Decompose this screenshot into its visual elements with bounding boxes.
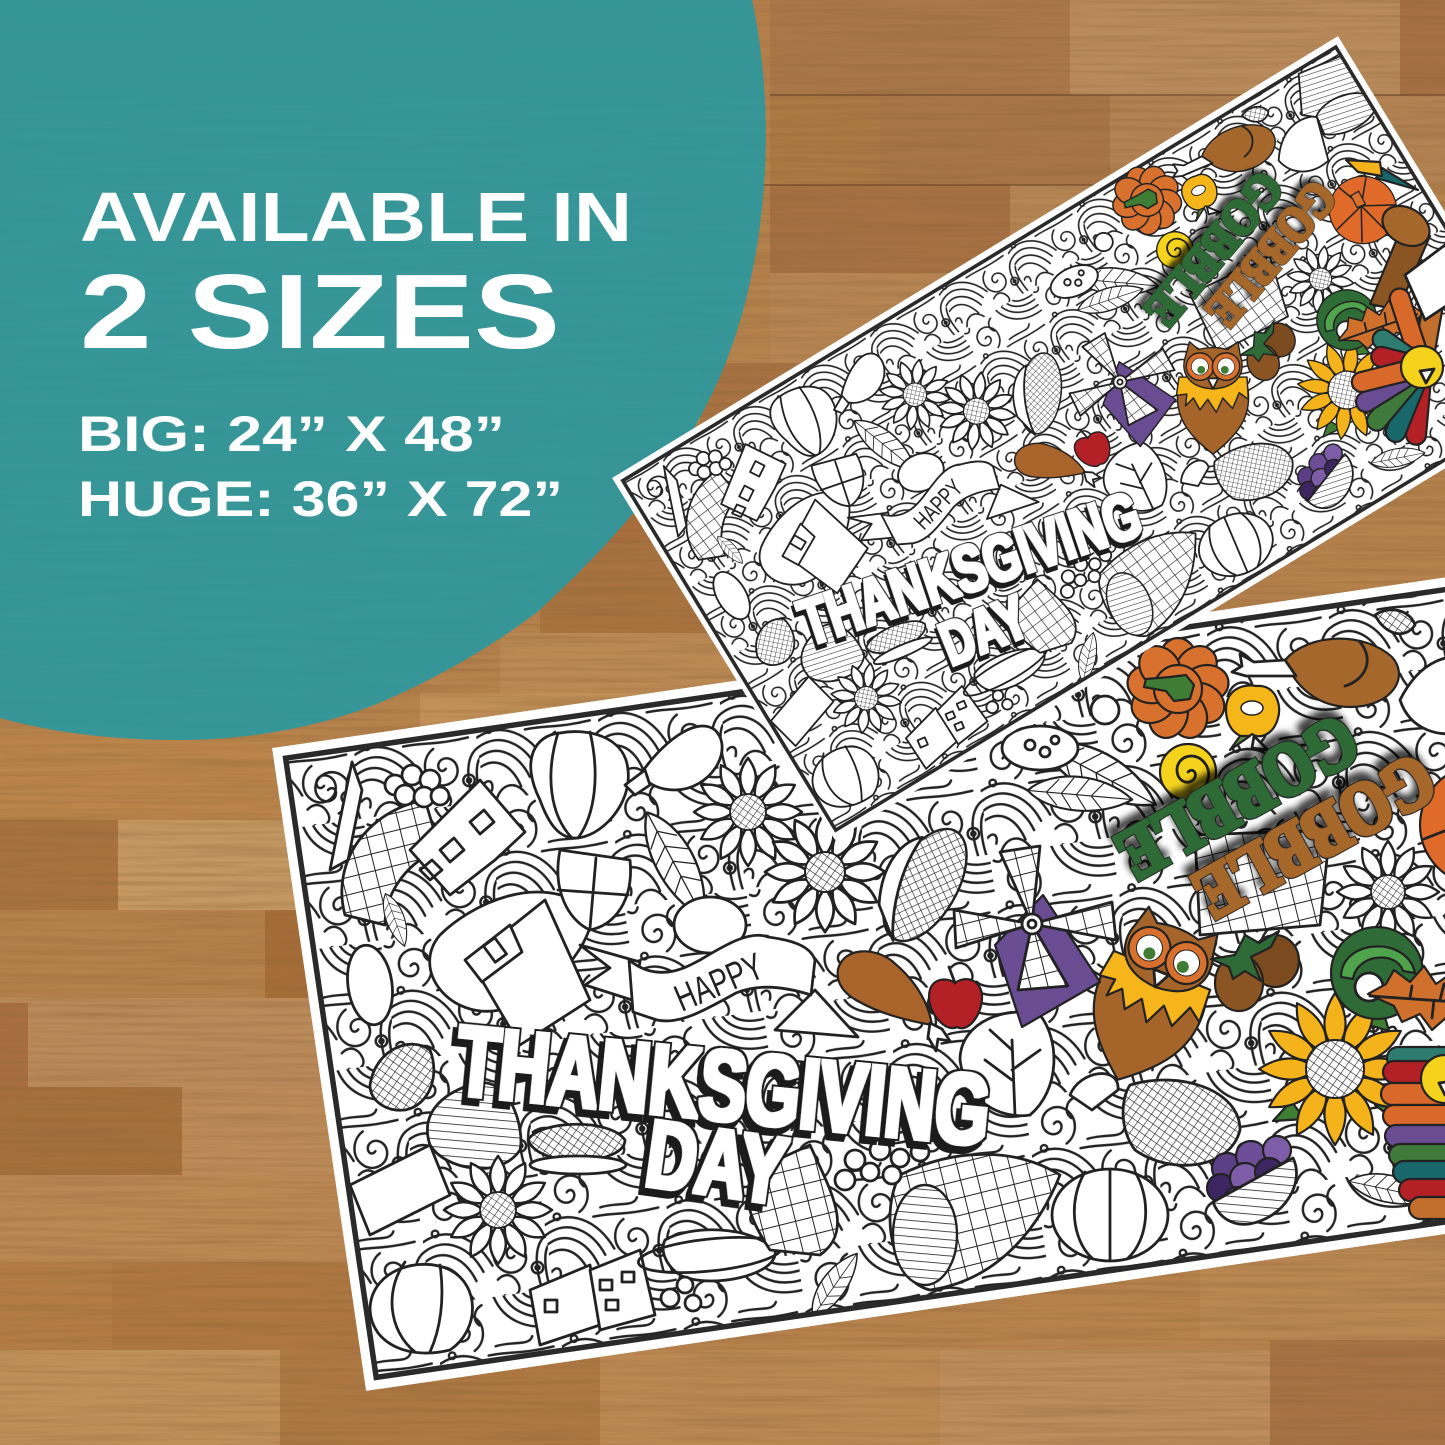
colour: drumstick (1232, 639, 1399, 707)
happy banner text: HAPPY (669, 946, 770, 1020)
small colour: owl (1176, 342, 1249, 454)
small colour: cabbage (1308, 281, 1386, 359)
title: thanksgiving: THANKSGIVING (452, 1005, 995, 1168)
small colour: sunflower (1282, 325, 1412, 455)
small colour: carrot (1346, 160, 1418, 190)
colour: acorns (1211, 931, 1299, 1011)
small colour: red apple (1068, 421, 1116, 472)
colour: red apple (929, 967, 982, 1028)
small colour: yellow apple (1180, 174, 1220, 222)
colour: yellow swirl (1160, 744, 1216, 800)
colour: owl (1092, 906, 1218, 1081)
colour: grapes bowl (1207, 1136, 1296, 1224)
small gobble brown: GOBBLE (1195, 171, 1348, 339)
poster line art (286, 575, 1445, 1377)
size list (78, 406, 563, 527)
colour: turkey (1381, 1047, 1445, 1219)
colour: roast (838, 951, 950, 1051)
colour: sunflower (1259, 993, 1411, 1145)
gobble brown: GOBBLE (1180, 737, 1445, 936)
small title: day: DAY (931, 583, 1038, 679)
small building (1405, 245, 1445, 320)
colour: orange pumpkin (1124, 638, 1232, 743)
small colour: oak leaf (1331, 288, 1429, 363)
small colour: orange pumpkin right (1319, 166, 1407, 254)
small colour: yellow swirl (1156, 230, 1194, 269)
small colour: turkey (1350, 285, 1445, 446)
small colour: drumstick (1172, 124, 1276, 178)
colour: cabbage (1331, 927, 1423, 1019)
small colour: grapes bowl (1287, 440, 1364, 516)
heading line: 2 sizes: 2 SIZES (80, 253, 560, 371)
title: day: DAY (640, 1100, 793, 1226)
panel: small poster (576, 24, 1445, 853)
size: big: BIG: 24” X 48” (78, 406, 505, 462)
teal circle panel (0, 0, 766, 740)
colour: orange pumpkin cut by edge (1418, 775, 1445, 876)
panel: big poster (272, 561, 1445, 1391)
small colour: orange pumpkin (1112, 166, 1182, 236)
small colour: windmill (1053, 314, 1197, 464)
small poster line art (576, 24, 1445, 853)
colour: yellow apple (1226, 685, 1279, 750)
small gobble green: GOBBLE (1134, 161, 1295, 338)
colour: oak leaf (1368, 966, 1445, 1030)
small title: thanksgiving: THANKSGIVING (790, 477, 1150, 660)
small colour: wooden log (1370, 198, 1437, 310)
gobble green: GOBBLE (1103, 698, 1372, 897)
colour: windmill (954, 846, 1116, 1027)
heading line: available in: AVAILABLE IN (80, 178, 632, 256)
small colour: roast (1010, 424, 1103, 512)
small happy text: HAPPY (909, 475, 968, 535)
heading: available in 2 sizes (80, 178, 632, 371)
size: huge: HUGE: 36” X 72” (78, 471, 563, 527)
small colour: acorns (1240, 320, 1296, 382)
